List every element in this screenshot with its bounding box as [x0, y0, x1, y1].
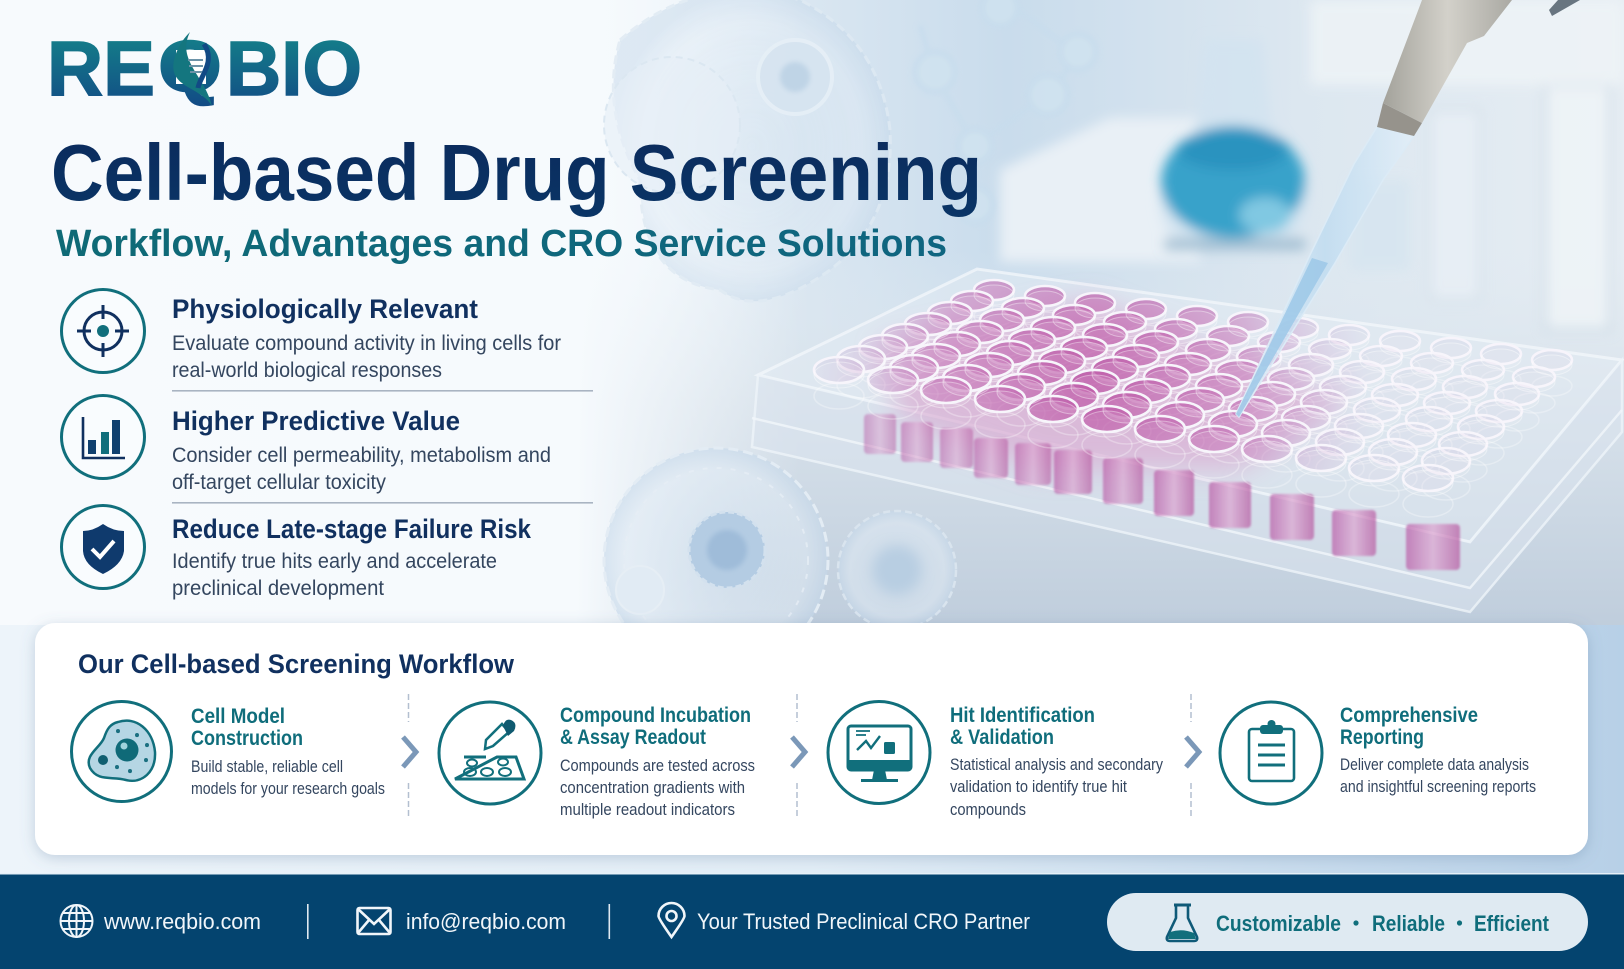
arrow 1 [403, 737, 416, 767]
pink glow under wells [880, 300, 1345, 470]
logo: BIO [226, 26, 362, 112]
front row liquid columns [864, 414, 1460, 570]
step 3: hit identification: compounds [950, 800, 1026, 819]
step 3: hit identification [828, 702, 1163, 819]
pill: customizable reliable efficient: Reliable [1372, 911, 1445, 936]
benefit: higher predictive value: off-target cellular toxicity [172, 471, 386, 494]
benefit: physiologically relevant: real-world biological responses [172, 359, 442, 382]
step 1: cell model construction: models for your research goals [191, 779, 385, 798]
icon: bar chart [62, 396, 144, 478]
icon: dropper and plate [439, 702, 541, 804]
step 1: cell model construction: Build stable, reliable cell [191, 757, 343, 776]
step 3: hit identification: Hit Identification [950, 704, 1095, 727]
benefit: physiologically relevant: Physiologically Relevant [172, 294, 478, 324]
step 2: compound incubation: Compounds are tested across [560, 756, 755, 775]
benefit: physiologically relevant [62, 290, 561, 382]
email: info@reqbio.com [406, 909, 566, 934]
pill: customizable reliable efficient: Customizable [1216, 911, 1341, 936]
icon: location pin [658, 903, 684, 937]
panel: workflow [35, 623, 1588, 855]
arrow 3 [1186, 737, 1199, 767]
icon: cell [72, 702, 172, 802]
subtitle: Workflow, Advantages and CRO Service Solutions [56, 223, 947, 265]
benefit: reduce late-stage failure risk [62, 506, 532, 600]
step 2: compound incubation: Compound Incubation [560, 704, 751, 727]
tagline: Your Trusted Preclinical CRO Partner [697, 909, 1030, 934]
benefit: reduce late-stage failure risk: preclinical development [172, 577, 384, 600]
step 4: comprehensive reporting: Deliver complete data analysis [1340, 755, 1529, 774]
logo: RE [47, 26, 155, 112]
icon: envelope [358, 908, 390, 934]
step 4: comprehensive reporting: Comprehensive [1340, 704, 1478, 727]
arrow 2 [792, 737, 805, 767]
ghost cell top [604, 0, 890, 301]
benefit: reduce late-stage failure risk: Reduce Late-stage Failure Risk [172, 514, 532, 544]
icon: flask [1167, 905, 1197, 941]
benefit: higher predictive value: Higher Predictive Value [172, 406, 460, 436]
step 4: comprehensive reporting: Reporting [1340, 726, 1424, 749]
step 3: hit identification: Statistical analysis and secondary [950, 755, 1163, 774]
band below panel [0, 625, 1624, 874]
benefit: reduce late-stage failure risk: Identify true hits early and accelerate [172, 550, 497, 573]
icon: clipboard [1220, 702, 1322, 804]
step 1: cell model construction: Cell Model [191, 705, 285, 728]
workflow heading: Our Cell-based Screening Workflow [78, 649, 515, 679]
pipette [1236, 0, 1580, 417]
step 1: cell model construction: Construction [191, 727, 303, 750]
step 3: hit identification: & Validation [950, 726, 1054, 749]
left white fade [0, 0, 800, 630]
step 2: compound incubation: & Assay Readout [560, 726, 706, 749]
benefit: higher predictive value: Consider cell permeability, metabolism and [172, 444, 551, 467]
ghost cells bottom [604, 448, 956, 672]
logo [47, 26, 362, 112]
step 2: compound incubation: multiple readout indicators [560, 800, 735, 819]
plate body [758, 269, 1622, 542]
benefit: physiologically relevant: Evaluate compound activity in living cells for [172, 332, 561, 355]
step 1: cell model construction [72, 702, 385, 802]
step 4: comprehensive reporting: and insightful screening reports [1340, 777, 1536, 796]
icon: target [62, 290, 144, 372]
icon: globe [60, 905, 92, 937]
step 4: comprehensive reporting [1220, 702, 1536, 804]
well openings [814, 280, 1572, 491]
molecule network [915, 0, 1096, 223]
well tube depth [814, 306, 1572, 517]
icon: shield [62, 506, 144, 588]
logo: Q [158, 27, 222, 107]
blue flask [1160, 40, 1308, 250]
step 2: compound incubation: concentration gradients with [560, 778, 745, 797]
white notebook stack [1000, 118, 1200, 262]
footer bar [0, 873, 1624, 969]
step 3: hit identification: validation to identify true hit [950, 777, 1127, 796]
benefit: higher predictive value [62, 396, 551, 494]
icon: monitor [828, 702, 930, 804]
title: Cell-based Drug Screening [51, 128, 982, 217]
well plate [752, 269, 1622, 612]
pill: customizable reliable efficient [1107, 893, 1588, 951]
step 2: compound incubation [439, 702, 755, 819]
pill: customizable reliable efficient: Efficient [1474, 911, 1550, 936]
website: www.reqbio.com [103, 909, 261, 934]
background glassware [1310, 0, 1624, 330]
